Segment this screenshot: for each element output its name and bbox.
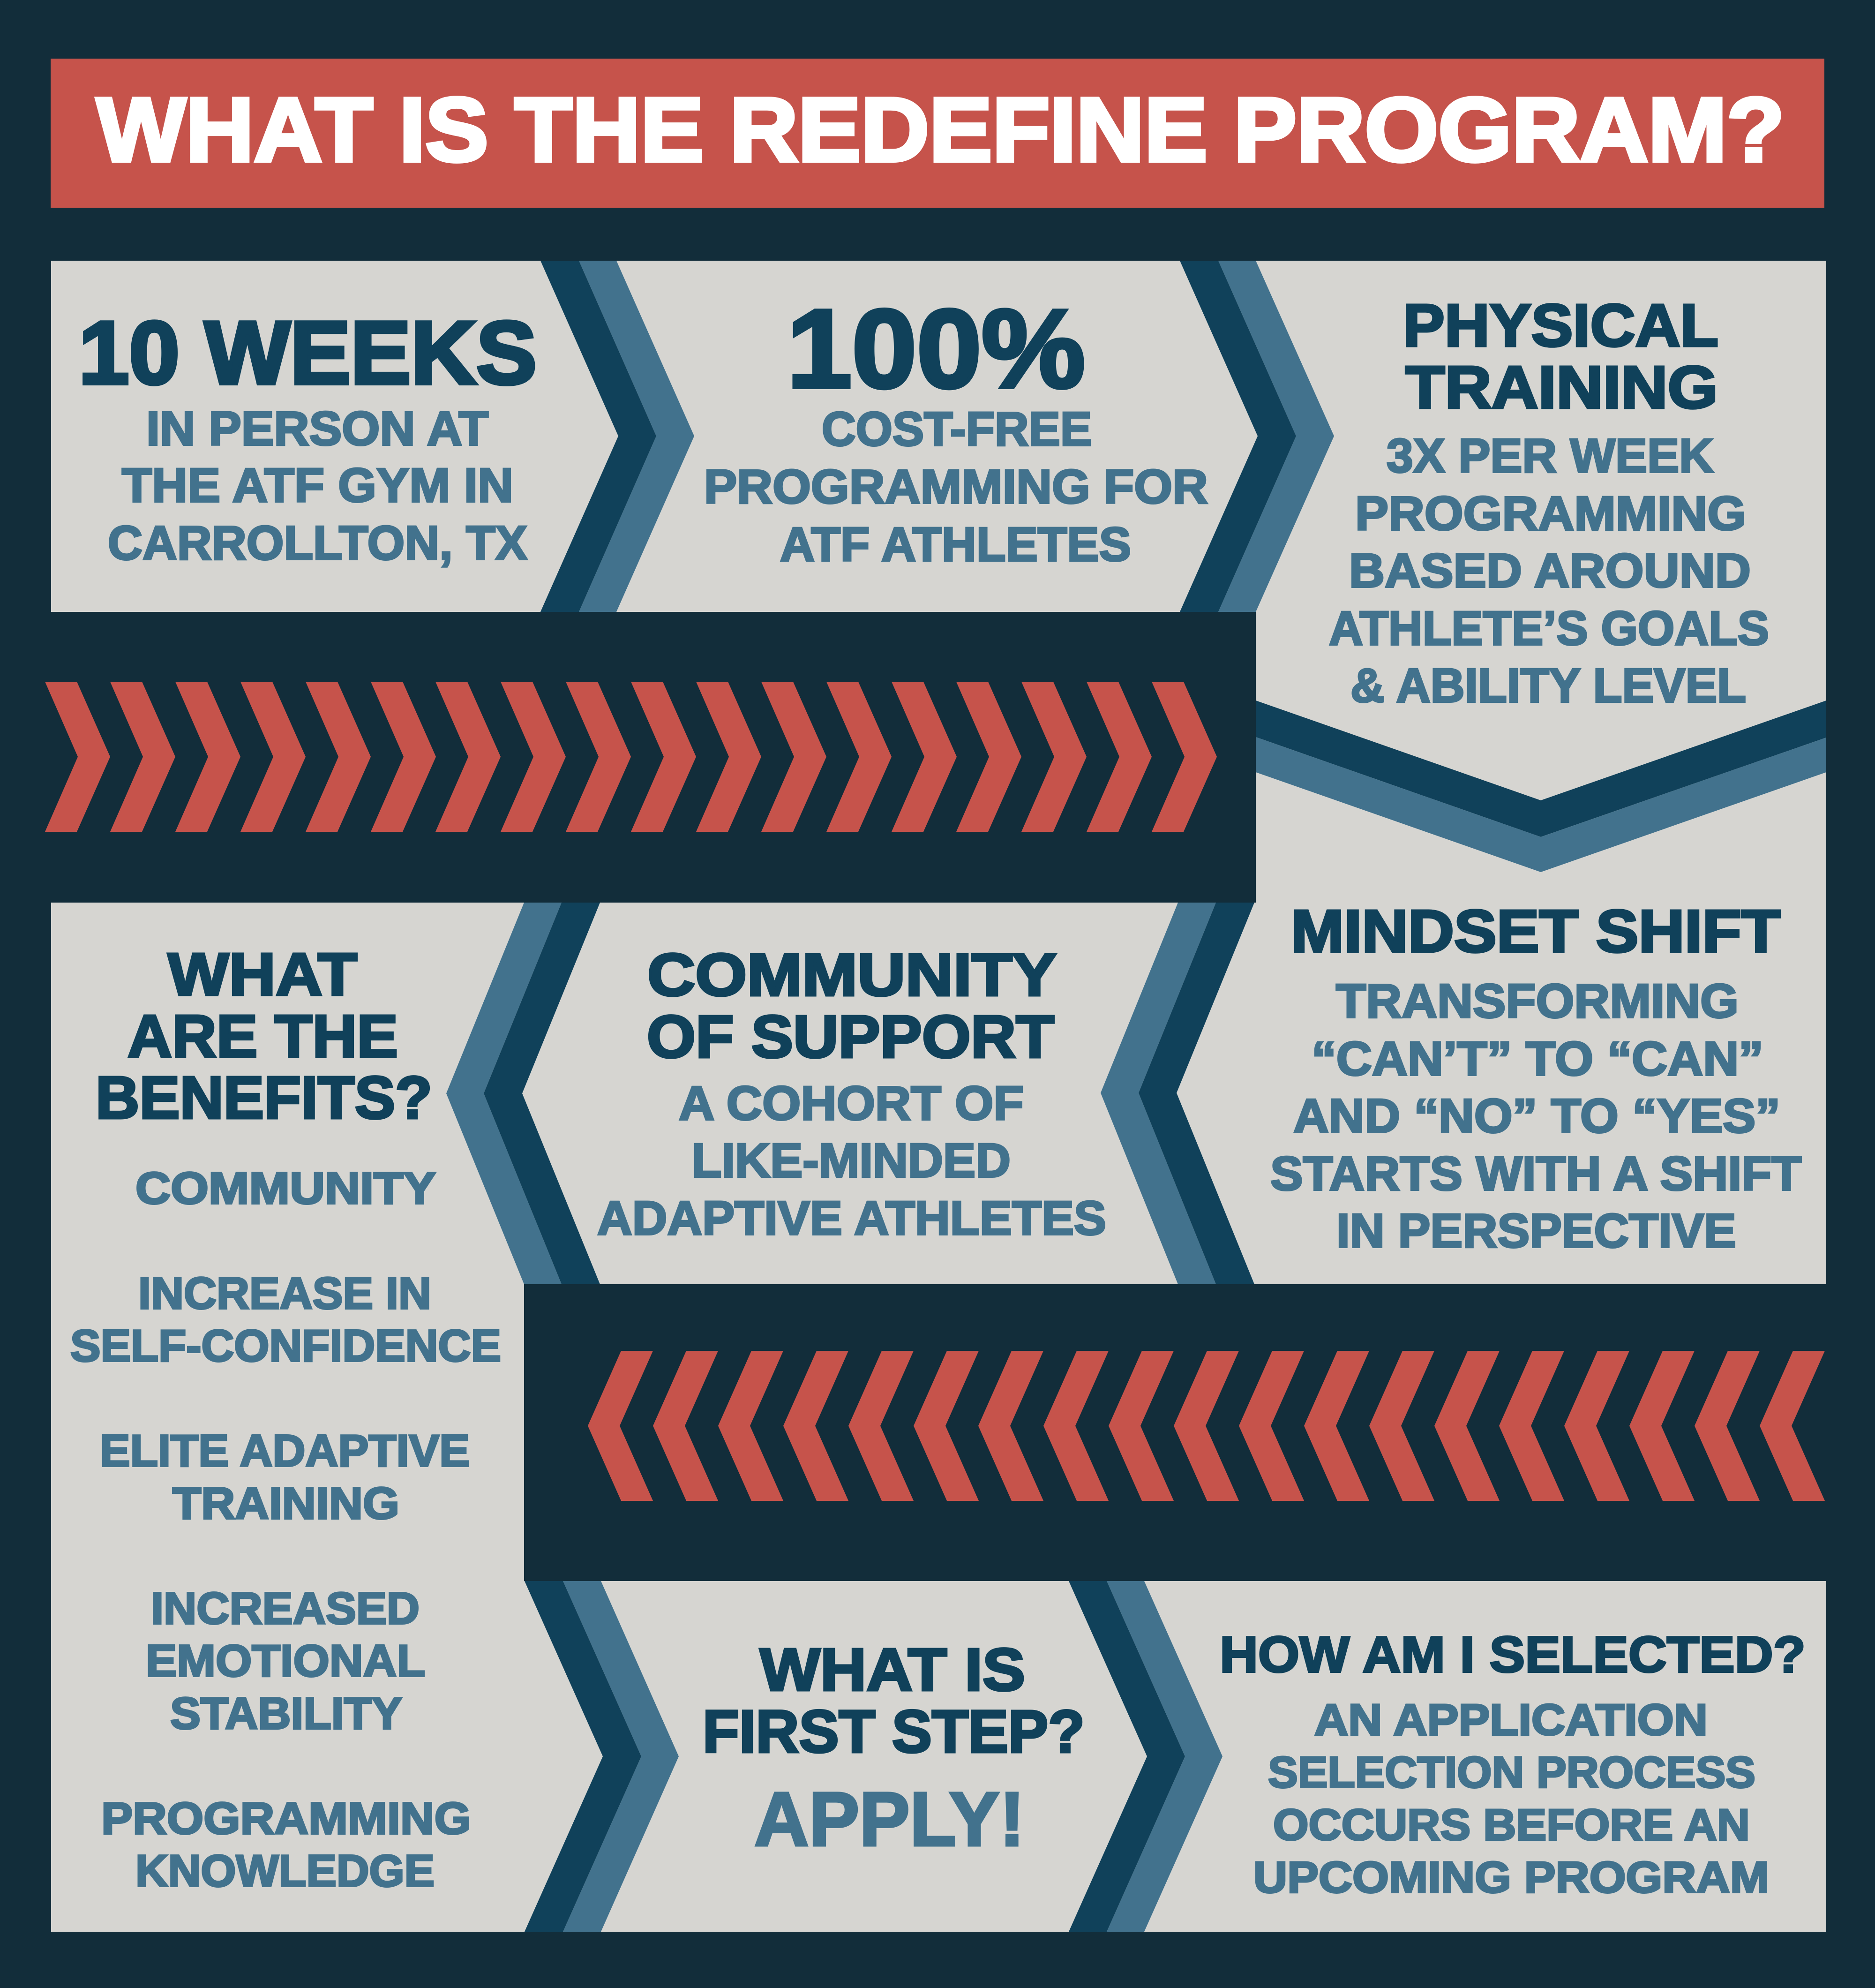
text: cost-free programming: COST-FREE xyxy=(822,402,1092,456)
light panel field xyxy=(51,261,1826,1932)
text: training description xyxy=(1329,429,1769,712)
text: in person at the ATF gym: CARROLLTON, TX xyxy=(108,516,527,570)
arrow: chevron between first step and how am I selected xyxy=(1069,1581,1222,1932)
heading: how am I selected: HOW AM I SELECTED? xyxy=(1220,1626,1806,1683)
heading: what are the benefits: BENEFITS? xyxy=(96,1064,432,1131)
text: selection description: SELECTION PROCESS xyxy=(1268,1747,1755,1797)
panel: 10 weeks xyxy=(79,303,537,570)
heading: community of support xyxy=(647,941,1057,1070)
arrow: chevron between community and benefits xyxy=(446,903,600,1284)
panel: physical training xyxy=(1329,292,1769,712)
list item: programming knowledge: PROGRAMMING xyxy=(101,1793,471,1844)
list item: emotional stability: STABILITY xyxy=(170,1688,402,1739)
panel: community of support xyxy=(597,941,1106,1245)
text: in person at the ATF gym: IN PERSON AT xyxy=(146,402,488,455)
text: mindset description: AND “NO” TO “YES” xyxy=(1293,1089,1780,1143)
text: cohort description xyxy=(597,1077,1106,1245)
list item: emotional stability: EMOTIONAL xyxy=(146,1636,425,1686)
list item: self-confidence: INCREASE IN xyxy=(138,1268,431,1318)
arrow: chevron between 10 weeks and 100% xyxy=(540,261,694,612)
text: training description: ATHLETE’S GOALS xyxy=(1329,602,1769,655)
text: cost-free programming xyxy=(704,402,1208,571)
list item: emotional stability: INCREASED xyxy=(151,1583,420,1634)
list item: emotional stability xyxy=(146,1583,425,1739)
heading: community of support: OF SUPPORT xyxy=(647,1003,1054,1070)
text: cost-free programming: PROGRAMMING FOR xyxy=(704,460,1208,513)
text: mindset description xyxy=(1270,974,1801,1258)
red chevrons pointing left xyxy=(588,1351,1825,1501)
text: cohort description: A COHORT OF xyxy=(679,1077,1024,1130)
panel: mindset shift xyxy=(1270,898,1801,1258)
text: cohort description: LIKE-MINDED xyxy=(692,1134,1011,1187)
text: selection description: OCCURS BEFORE AN xyxy=(1273,1800,1750,1849)
text: mindset description: STARTS WITH A SHIFT xyxy=(1270,1147,1801,1200)
text: training description: PROGRAMMING xyxy=(1355,487,1746,540)
call to action: apply: APPLY! xyxy=(754,1776,1025,1862)
list item: community: COMMUNITY xyxy=(135,1163,436,1213)
red chevrons pointing right xyxy=(45,682,1217,832)
text: training description: & ABILITY LEVEL xyxy=(1350,659,1746,712)
heading: what is first step xyxy=(703,1636,1085,1765)
heading: mindset shift: MINDSET SHIFT xyxy=(1291,898,1780,965)
list item: self-confidence xyxy=(70,1268,501,1371)
text: in person at the ATF gym xyxy=(108,402,527,570)
band: lower dark band with red arrows xyxy=(524,1284,1875,1581)
heading: what is first step: WHAT IS xyxy=(760,1636,1025,1703)
heading: what are the benefits: WHAT xyxy=(168,941,357,1008)
list item: programming knowledge xyxy=(101,1793,471,1896)
title banner xyxy=(51,59,1824,208)
text: training description: BASED AROUND xyxy=(1349,544,1751,597)
list item: elite adaptive training xyxy=(100,1426,470,1529)
panel: benefits xyxy=(70,941,501,1896)
panel: how am I selected xyxy=(1220,1626,1806,1902)
text: mindset description: TRANSFORMING xyxy=(1336,974,1739,1028)
arrow: downward chevron between physical training and mindset shift xyxy=(1256,700,1826,872)
text: in person at the ATF gym: THE ATF GYM IN xyxy=(122,459,513,512)
list item: programming knowledge: KNOWLEDGE xyxy=(135,1846,435,1896)
panel: first step xyxy=(703,1636,1085,1862)
heading: community of support: COMMUNITY xyxy=(647,941,1057,1009)
text: selection description: AN APPLICATION xyxy=(1314,1695,1708,1744)
title: WHAT IS THE REDEFINE PROGRAM? xyxy=(97,79,1785,180)
list item: self-confidence: SELF-CONFIDENCE xyxy=(70,1321,501,1371)
heading: physical training: TRAINING xyxy=(1405,354,1718,421)
arrow: chevron between benefits and first step xyxy=(525,1581,679,1932)
text: mindset description: IN PERSPECTIVE xyxy=(1336,1204,1736,1258)
text: cohort description: ADAPTIVE ATHLETES xyxy=(597,1191,1106,1245)
heading: physical training: PHYSICAL xyxy=(1403,292,1718,359)
list item: elite adaptive training: ELITE ADAPTIVE xyxy=(100,1426,470,1476)
text: cost-free programming: ATF ATHLETES xyxy=(780,518,1131,571)
heading: 10 weeks: 10 WEEKS xyxy=(79,303,537,403)
heading: what are the benefits: ARE THE xyxy=(128,1003,398,1070)
list item: elite adaptive training: TRAINING xyxy=(172,1478,399,1529)
text: selection description: UPCOMING PROGRAM xyxy=(1253,1852,1769,1902)
heading: what are the benefits xyxy=(96,941,432,1131)
text: training description: 3X PER WEEK xyxy=(1387,429,1714,482)
band: upper dark band with red arrows xyxy=(0,612,1256,903)
heading: physical training xyxy=(1403,292,1718,421)
text: selection description xyxy=(1253,1695,1769,1902)
heading: what is first step: FIRST STEP? xyxy=(703,1698,1085,1765)
text: mindset description: “CAN’T” TO “CAN” xyxy=(1312,1032,1763,1085)
arrow: chevron between mindset shift and community xyxy=(1101,903,1254,1284)
panel: 100% cost-free xyxy=(704,287,1208,571)
arrow: chevron between 100% and physical training xyxy=(1180,261,1334,612)
heading: 100%: 100% xyxy=(787,287,1085,411)
